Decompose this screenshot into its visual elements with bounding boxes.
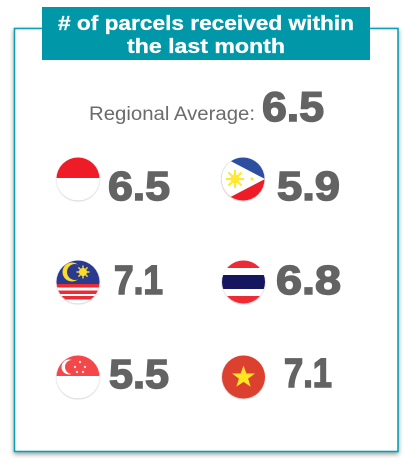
Philippines row item xyxy=(220,157,340,202)
icon: Vietnam flag xyxy=(222,355,266,399)
Malaysia row item xyxy=(56,257,163,304)
regional average xyxy=(89,83,324,130)
value: 7.1 xyxy=(284,350,332,396)
Indonesia row item xyxy=(56,157,170,202)
heading banner xyxy=(42,7,370,60)
value: 6.8 xyxy=(276,257,341,303)
value: 7.1 xyxy=(114,257,163,303)
Singapore row item xyxy=(56,351,169,399)
icon: Philippines flag xyxy=(219,155,265,203)
value: 5.9 xyxy=(277,163,340,209)
Vietnam row item xyxy=(222,350,332,399)
value: 6.5 xyxy=(108,163,170,209)
value: 5.5 xyxy=(109,351,169,397)
regional average: Regional Average: xyxy=(89,104,255,125)
heading banner: # of parcels received within xyxy=(58,13,354,35)
heading banner: the last month xyxy=(127,36,285,58)
icon: Malaysia flag xyxy=(56,260,100,304)
regional average: 6.5 xyxy=(262,83,324,130)
icon: Indonesia flag xyxy=(56,157,100,201)
icon: Singapore flag xyxy=(56,355,100,399)
icon: Thailand flag xyxy=(222,260,266,304)
Thailand row item xyxy=(222,257,341,304)
